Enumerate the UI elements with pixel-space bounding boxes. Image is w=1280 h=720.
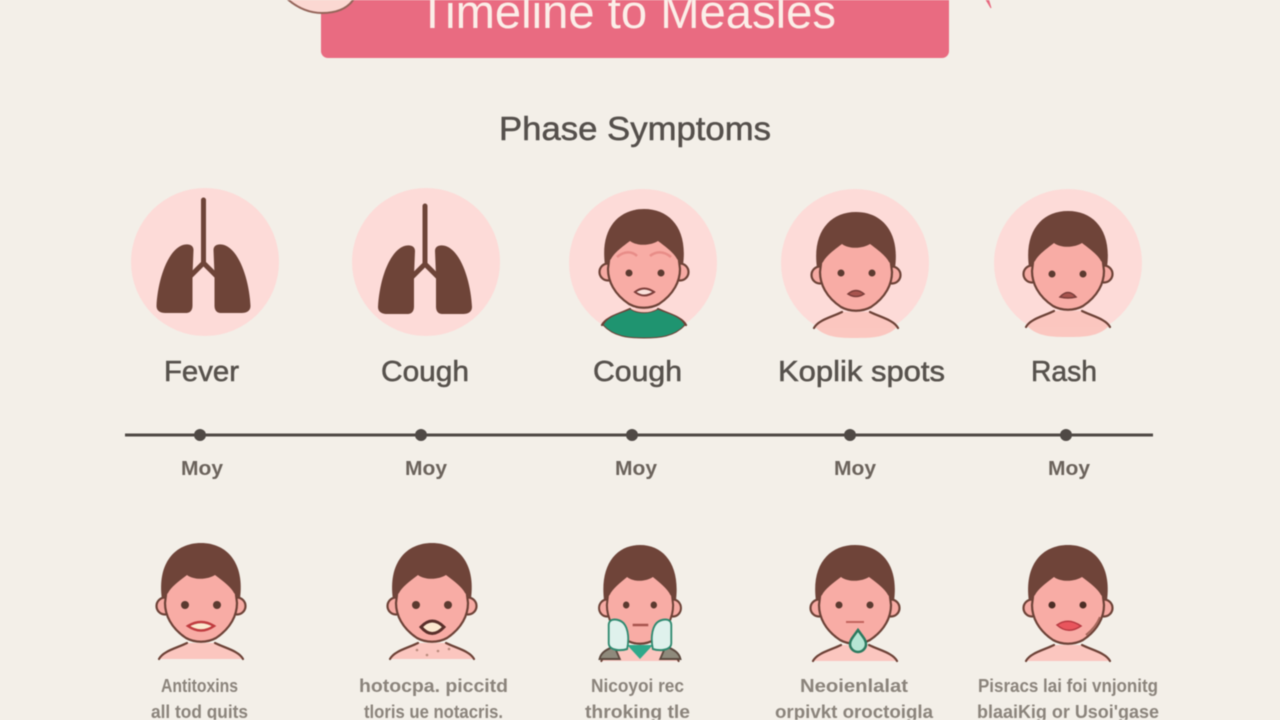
stage 4 xyxy=(775,545,934,720)
icon: child face xyxy=(812,212,900,338)
stage 5 xyxy=(977,545,1159,720)
timeline labels: Moy xyxy=(405,458,448,480)
label: koplik spots: Koplik spots xyxy=(778,356,945,388)
timeline labels: Moy xyxy=(834,458,877,480)
section heading: Phase Symptoms xyxy=(499,110,771,147)
caption xyxy=(775,676,934,720)
label: fever: Fever xyxy=(164,356,239,388)
caption: hotocpa. piccitd xyxy=(359,676,508,696)
timeline labels: Moy xyxy=(615,458,658,480)
symptom: koplik spots xyxy=(778,189,945,388)
icon: child with neck bandage xyxy=(599,545,681,661)
timeline labels: Moy xyxy=(181,458,224,480)
icon: child in green shirt xyxy=(600,209,688,338)
icon: lungs xyxy=(156,200,250,313)
symptom: rash xyxy=(994,189,1142,388)
icon: child face xyxy=(1024,211,1112,337)
timeline labels: Moy xyxy=(1048,458,1091,480)
stage 2 xyxy=(359,543,508,720)
caption xyxy=(585,676,690,720)
icon circle: fever xyxy=(131,188,279,336)
caption xyxy=(977,676,1159,720)
title banner xyxy=(321,0,949,58)
icon: lungs xyxy=(378,206,472,314)
caption xyxy=(359,676,508,720)
caption: Pisracs lai foi vnjonitg xyxy=(978,676,1158,696)
icon circle: cough face xyxy=(569,189,717,337)
timeline xyxy=(125,429,1153,441)
label: rash: Rash xyxy=(1031,356,1097,388)
caption xyxy=(151,676,248,720)
icon circle: cough xyxy=(352,188,500,336)
symptom: cough face xyxy=(569,189,717,388)
caption: Nicoyoi rec xyxy=(591,676,684,696)
label: cough: Cough xyxy=(593,356,682,388)
stage 1 xyxy=(151,543,248,720)
icon: child with spots on chest xyxy=(388,543,476,659)
stage 3 xyxy=(585,545,690,720)
icon: child with red lips xyxy=(1024,545,1112,661)
decoration: hand at top left xyxy=(283,0,356,13)
caption: Neoienlalat xyxy=(800,676,908,696)
timeline labels xyxy=(181,458,1091,480)
icon circle: rash xyxy=(994,189,1142,337)
icon: child with droplet xyxy=(810,545,900,661)
symptom: fever xyxy=(131,188,279,388)
label: cough: Cough xyxy=(381,356,469,388)
symptom: cough lungs xyxy=(352,188,500,388)
decoration: stroke at top right xyxy=(985,0,991,8)
icon circle: koplik spots xyxy=(781,189,929,337)
icon: child with open mouth xyxy=(156,543,246,659)
caption: Antitoxins xyxy=(161,676,238,696)
timeline markers xyxy=(194,429,1072,441)
